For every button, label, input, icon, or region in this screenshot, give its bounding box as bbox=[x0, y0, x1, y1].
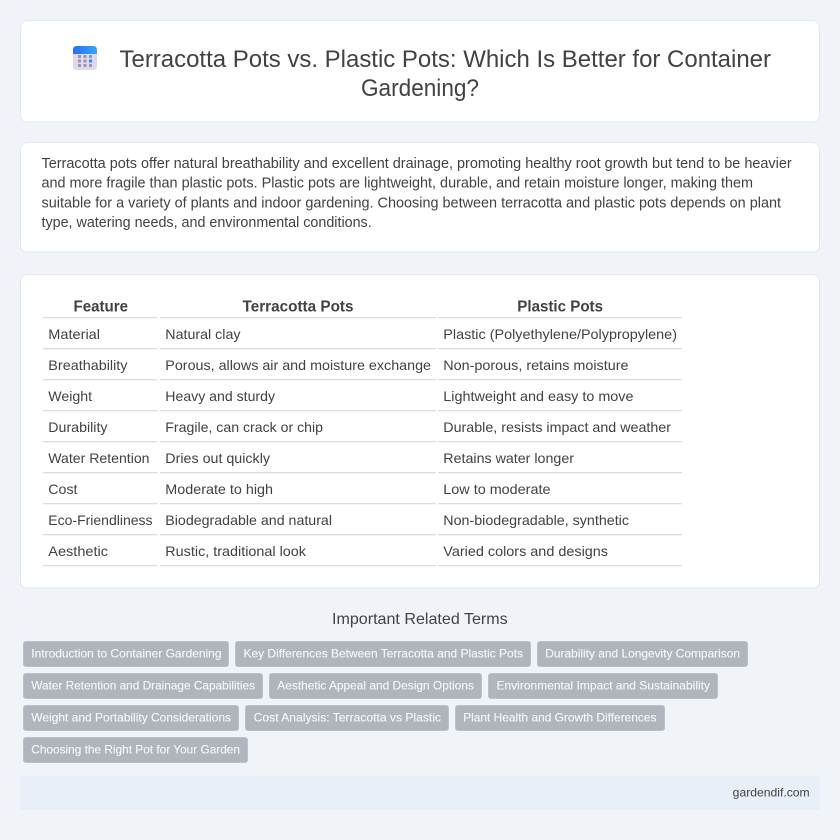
tag bbox=[246, 706, 448, 730]
tag: Introduction to Container Gardening bbox=[31, 647, 221, 661]
table row: Durability: Durability bbox=[48, 419, 108, 435]
text block: description bbox=[42, 156, 792, 231]
tag: Weight and Portability Considerations bbox=[31, 711, 231, 725]
table row: Water Retention: Retains water longer bbox=[443, 450, 574, 466]
title: Gardening? bbox=[361, 75, 479, 102]
table row: Water Retention: Dries out quickly bbox=[165, 450, 270, 466]
title: Terracotta Pots vs. Plastic Pots: Which Is Better for Container bbox=[120, 46, 771, 73]
tag: Durability and Longevity Comparison bbox=[545, 647, 740, 661]
tag bbox=[24, 706, 238, 730]
tag list: related terms bbox=[24, 642, 748, 762]
text block: description: Terracotta pots offer natural breathability and excellent drainage, promoting healthy root growth but tend to be heavier bbox=[42, 156, 792, 172]
table header row: Feature bbox=[74, 299, 128, 316]
icon: calendar bbox=[73, 46, 97, 70]
table row: Material: Material bbox=[48, 326, 100, 342]
table row: Cost: Low to moderate bbox=[443, 481, 551, 497]
table row: Weight: Heavy and sturdy bbox=[165, 388, 275, 404]
table row: Weight bbox=[43, 388, 682, 411]
tag bbox=[24, 642, 228, 666]
table row: Eco-Friendliness: Eco-Friendliness bbox=[48, 512, 152, 528]
tag: Plant Health and Growth Differences bbox=[463, 711, 656, 725]
tag: Water Retention and Drainage Capabilities bbox=[31, 679, 255, 693]
table row: Breathability: Non-porous, retains moisture bbox=[443, 357, 629, 373]
table row: Water Retention bbox=[43, 450, 682, 473]
table row: Eco-Friendliness: Non-biodegradable, synthetic bbox=[443, 512, 629, 528]
table row: Breathability bbox=[43, 357, 682, 380]
table row: Aesthetic bbox=[43, 543, 682, 566]
tag bbox=[270, 674, 482, 698]
tag bbox=[488, 674, 718, 698]
text block: description: suitable for a variety of plants and indoor gardening. Choosing between terracotta and plastic pots depends on plant bbox=[42, 195, 781, 211]
table row: Eco-Friendliness: Biodegradable and natural bbox=[165, 512, 332, 528]
tag bbox=[24, 674, 262, 698]
title bbox=[120, 46, 771, 102]
footer bar bbox=[20, 776, 820, 810]
heading: related terms: Important Related Terms bbox=[332, 611, 508, 628]
table row: Breathability: Breathability bbox=[48, 357, 127, 373]
table row: Cost bbox=[43, 481, 682, 504]
tag bbox=[24, 738, 248, 762]
table row: Breathability: Porous, allows air and moisture exchange bbox=[165, 357, 431, 373]
tag: Aesthetic Appeal and Design Options bbox=[277, 679, 474, 693]
tag: Key Differences Between Terracotta and Plastic Pots bbox=[244, 647, 523, 661]
panel: description bbox=[20, 142, 820, 252]
text block: description: and more fragile than plastic pots. Plastic pots are lightweight, durable, and retain moisture longer, making them bbox=[42, 176, 753, 192]
tag: Choosing the Right Pot for Your Garden bbox=[31, 743, 240, 757]
table row: Cost: Cost bbox=[48, 481, 78, 497]
table row: Weight: Lightweight and easy to move bbox=[443, 388, 634, 404]
table row: Aesthetic: Varied colors and designs bbox=[443, 543, 608, 559]
table row: Aesthetic: Aesthetic bbox=[48, 543, 108, 559]
tag bbox=[538, 642, 748, 666]
panel: comparison table bbox=[20, 274, 820, 588]
footer source text: gardendif.com bbox=[733, 786, 810, 800]
table row: Water Retention: Water Retention bbox=[48, 450, 149, 466]
table header row: Terracotta Pots bbox=[242, 299, 354, 316]
panel: header bbox=[20, 20, 820, 122]
tag bbox=[456, 706, 664, 730]
table row: Durability bbox=[43, 419, 682, 442]
table row: Durability: Durable, resists impact and weather bbox=[443, 419, 671, 435]
text block: description: type, watering needs, and environmental conditions. bbox=[42, 215, 372, 231]
table row: Material bbox=[43, 326, 682, 349]
table row: Material: Natural clay bbox=[165, 326, 240, 342]
table header row: Plastic Pots bbox=[517, 299, 603, 316]
table row: Weight: Weight bbox=[48, 388, 92, 404]
table row: Aesthetic: Rustic, traditional look bbox=[165, 543, 307, 559]
table row: Material: Plastic (Polyethylene/Polypropylene) bbox=[443, 326, 677, 342]
table header row bbox=[43, 299, 682, 318]
table row: Durability: Fragile, can crack or chip bbox=[165, 419, 323, 435]
table row: Eco-Friendliness bbox=[43, 512, 682, 535]
tag: Cost Analysis: Terracotta vs Plastic bbox=[254, 711, 441, 725]
table row: Cost: Moderate to high bbox=[165, 481, 273, 497]
tag: Environmental Impact and Sustainability bbox=[496, 679, 710, 693]
tag bbox=[236, 642, 530, 666]
